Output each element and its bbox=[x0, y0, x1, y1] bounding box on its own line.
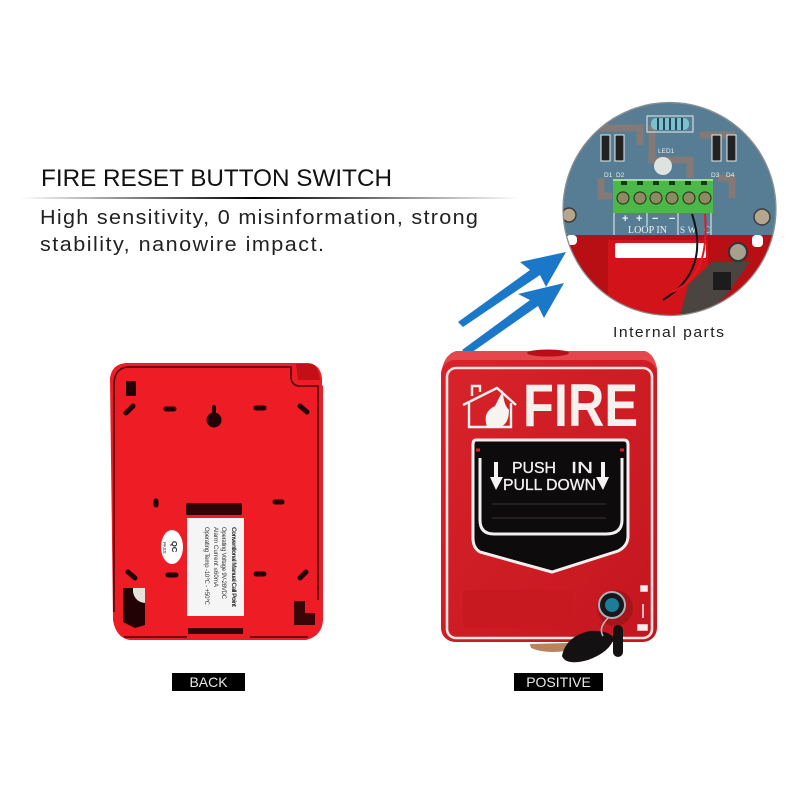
terminal legend: − bbox=[652, 213, 658, 225]
back housing bbox=[110, 363, 323, 640]
LED bbox=[654, 157, 672, 175]
PCB labels: D1 bbox=[604, 172, 613, 179]
PCB labels: D3 bbox=[711, 172, 720, 179]
back of device bbox=[110, 363, 323, 640]
arrow: right down bbox=[596, 462, 609, 490]
key switch bbox=[597, 586, 647, 630]
terminal legend: + bbox=[622, 213, 628, 225]
black key bbox=[562, 625, 623, 662]
PCB labels: D4 bbox=[726, 172, 735, 179]
caption: internal parts: Internal parts bbox=[613, 324, 724, 341]
specification label bbox=[187, 518, 244, 616]
specification label: Operating Temp -10℃ - +50℃ bbox=[203, 527, 209, 605]
description text: High sensitivity, 0 misinformation, strong bbox=[40, 207, 478, 229]
arrow: left down bbox=[490, 462, 503, 490]
specification label: Operating Voltage 9V-28VDC bbox=[220, 527, 226, 600]
description text bbox=[40, 207, 478, 256]
bottom-left cutout bbox=[123, 588, 145, 628]
mounting slots bbox=[126, 406, 307, 578]
terminal legend: LOOP IN bbox=[628, 225, 667, 236]
caption: back bbox=[172, 673, 245, 691]
QC pass sticker: QC bbox=[170, 541, 179, 553]
keyhole mount bbox=[206, 405, 222, 428]
switch hardware bbox=[680, 262, 750, 316]
title: FIRE RESET BUTTON SWITCH bbox=[41, 165, 392, 192]
specification label: Alarm Current ≤60mA bbox=[212, 527, 218, 587]
terminal legend: − bbox=[669, 213, 675, 225]
description text: stability, nanowire impact. bbox=[40, 234, 324, 256]
wires bbox=[663, 214, 697, 300]
push in / pull down legend: IN bbox=[571, 460, 593, 477]
recessed panel bbox=[463, 590, 573, 628]
caption: positive bbox=[514, 673, 603, 691]
label recess bbox=[186, 503, 242, 515]
PCB labels: LED1 bbox=[658, 148, 675, 155]
push in / pull down legend: PUSH bbox=[512, 460, 556, 477]
FIRE wordmark: FIRE bbox=[523, 372, 638, 439]
QC pass sticker: PASS bbox=[162, 542, 167, 554]
corner notch bbox=[296, 364, 320, 380]
top-left square bbox=[126, 381, 136, 396]
push in / pull down legend: PULL DOWN bbox=[503, 477, 596, 494]
front housing bbox=[441, 360, 657, 642]
blue arrows pointing to internal parts bbox=[458, 252, 566, 355]
resistor bbox=[647, 116, 693, 132]
terminal legend bbox=[614, 213, 711, 236]
front of device bbox=[441, 350, 657, 662]
terminal legend: SW C bbox=[680, 225, 710, 235]
inset: internal parts circle bbox=[560, 100, 780, 320]
icon: house with flame bbox=[463, 386, 516, 427]
bottom-right cutout bbox=[294, 601, 315, 625]
PCB copper traces bbox=[600, 125, 735, 198]
QC pass sticker bbox=[161, 530, 183, 564]
push in / pull down legend bbox=[503, 460, 596, 494]
specification label: Conventional Manual Call Point bbox=[230, 527, 237, 608]
top face bbox=[441, 351, 657, 375]
white inset border bbox=[447, 368, 652, 638]
window shading bbox=[492, 504, 606, 518]
caption: positive: POSITIVE bbox=[526, 674, 591, 690]
red housing bbox=[566, 235, 772, 315]
caption: back: BACK bbox=[189, 674, 228, 690]
handle inner white bar bbox=[480, 458, 622, 534]
keys behind bbox=[530, 643, 568, 652]
circle outline bbox=[563, 102, 776, 316]
terminal legend: + bbox=[636, 213, 642, 225]
black pull handle with white outline bbox=[473, 440, 628, 572]
PCB labels: D2 bbox=[616, 172, 625, 179]
PCB labels bbox=[604, 148, 735, 179]
screws bbox=[562, 208, 770, 225]
diodes bbox=[601, 135, 736, 161]
green terminal block bbox=[613, 179, 713, 213]
